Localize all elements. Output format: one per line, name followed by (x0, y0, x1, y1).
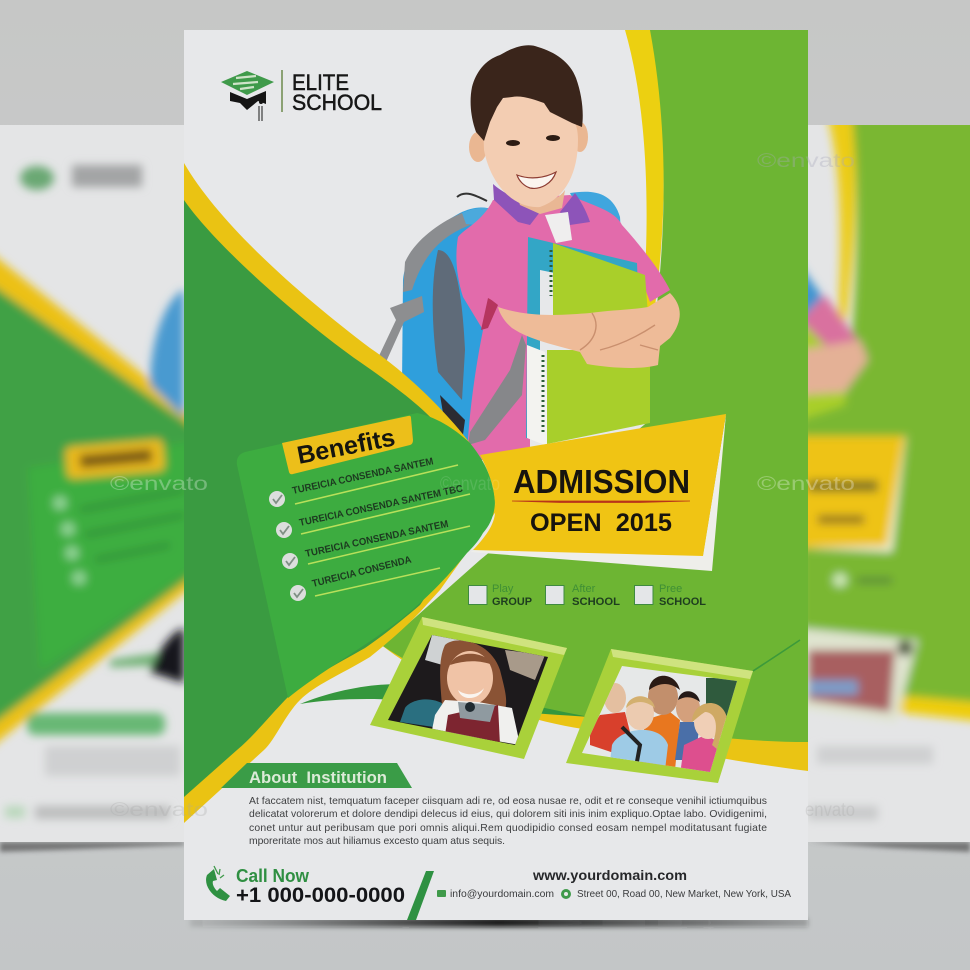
about institution heading (221, 763, 412, 788)
white pages (527, 345, 547, 444)
open 2015: OPEN 2015 (530, 509, 672, 537)
blue notebook (526, 237, 638, 440)
logo (221, 70, 382, 121)
thin green accent line (753, 640, 800, 671)
checkbox play group: Play (492, 583, 514, 595)
smile (517, 172, 556, 188)
envato watermarks (110, 151, 855, 821)
striped collar (493, 184, 540, 225)
banner yellow (473, 414, 726, 556)
blurred flyer: left (0, 125, 200, 842)
red divider (512, 501, 690, 502)
checkbox play group: GROUP (492, 596, 532, 608)
left panel yellow band (184, 163, 497, 823)
about body text: mporeritate mos aut hiliamus excesto quam atus sequis. (249, 836, 505, 847)
address contact: Street 00, Road 00, New Market, New York, USA (577, 889, 791, 900)
panel shape (237, 413, 495, 698)
face (483, 95, 578, 207)
about body text (249, 796, 767, 847)
envato watermarks: ©envato (110, 474, 208, 495)
photo: group of children (566, 649, 753, 783)
left panel dark green (184, 200, 430, 797)
logo: SCHOOL (292, 90, 382, 115)
photo: girl (370, 617, 567, 759)
envato watermarks: ©envato (440, 474, 500, 495)
lime notebook top (553, 243, 648, 320)
sleeve cuff (481, 298, 498, 330)
dark green swoosh (300, 684, 590, 717)
envato watermarks: ©envato (757, 151, 855, 172)
hand details (580, 313, 658, 350)
envato watermarks: envato (805, 800, 855, 821)
eyes (506, 135, 560, 146)
top yellow arc (625, 30, 664, 340)
phone number: +1 000-000-0000 (236, 884, 405, 907)
boy with backpack and books (378, 45, 680, 460)
photo content (575, 660, 745, 775)
arms (498, 293, 680, 368)
poster paper (184, 30, 808, 920)
logo divider (281, 70, 283, 112)
benefit item 2: TUREICIA CONSENDA SANTEM TBC (298, 483, 464, 529)
blurred flyer: right (800, 115, 970, 842)
website: www.yourdomain.com (532, 867, 687, 883)
call now label: Call Now (236, 866, 310, 886)
benefit item 1: TUREICIA CONSENDA SANTEM (291, 456, 434, 497)
grey strap (468, 335, 526, 445)
about body text: delicatat volorerum et dolore dendipi delecus id eius, qui dolorem siti inis inim expliquo.Optae labo. Ovidigenimi, (249, 809, 767, 820)
lower yellow wave (375, 620, 808, 771)
icon: envelope (437, 890, 446, 897)
about body text: conet untur aut peribusam que pori omnis aliqui.Rem quodipidio consed eosam nempel moditatusant fugiate (249, 823, 767, 834)
benefit item 4: TUREICIA CONSENDA (311, 555, 413, 590)
checkbox play group (468, 583, 532, 608)
benefits heading tag (282, 416, 413, 474)
photo frame (566, 649, 753, 783)
call now block (206, 866, 405, 907)
program checkboxes (468, 583, 706, 608)
checkbox pree school: Pree (659, 583, 682, 595)
flyer poster (184, 30, 808, 920)
benefits panel (237, 413, 495, 698)
hair (471, 45, 583, 141)
green slash (407, 871, 434, 920)
about body text: At faccatem nist, temquatum faceper ciisquam adi re, od eosa nusae re, odit et re conseque venihil ictiumquibus (249, 796, 767, 807)
photo frame (370, 617, 567, 759)
logo wordmark: ELITE (292, 70, 349, 95)
spiral binding (543, 250, 551, 435)
checkbox pree school (634, 583, 706, 608)
benefit item 3 (282, 519, 470, 569)
white undershirt (545, 212, 572, 243)
icon: backpack (378, 192, 622, 442)
checkbox pree school: SCHOOL (659, 596, 706, 608)
admission banner (470, 414, 726, 571)
icon: location pin (561, 889, 571, 899)
benefit item 4 (290, 555, 440, 601)
main green field (383, 30, 808, 742)
email contact: info@yourdomain.com (450, 889, 554, 900)
benefits heading tag: Benefits (295, 424, 397, 470)
benefit item 3: TUREICIA CONSENDA SANTEM (304, 519, 449, 560)
photo content (380, 630, 560, 750)
about institution heading: About Institution (249, 768, 387, 787)
admission title: ADMISSION (513, 463, 690, 500)
side flyer shadows (0, 842, 970, 852)
poster drop shadow (190, 918, 808, 927)
ears (469, 132, 487, 162)
envato watermarks: ©envato (110, 800, 208, 821)
lime notebook bottom (547, 350, 650, 444)
icon: graduation cap (221, 71, 274, 121)
envato watermarks: ©envato (757, 474, 855, 495)
banner paper edge (470, 414, 726, 571)
checkbox after school (546, 583, 620, 608)
checkbox after school: SCHOOL (572, 596, 620, 608)
icon: pink shirt (456, 195, 670, 460)
neck (515, 190, 565, 214)
checkbox after school: After (572, 583, 596, 595)
icon: phone (206, 866, 230, 901)
benefit item 1 (269, 456, 458, 507)
